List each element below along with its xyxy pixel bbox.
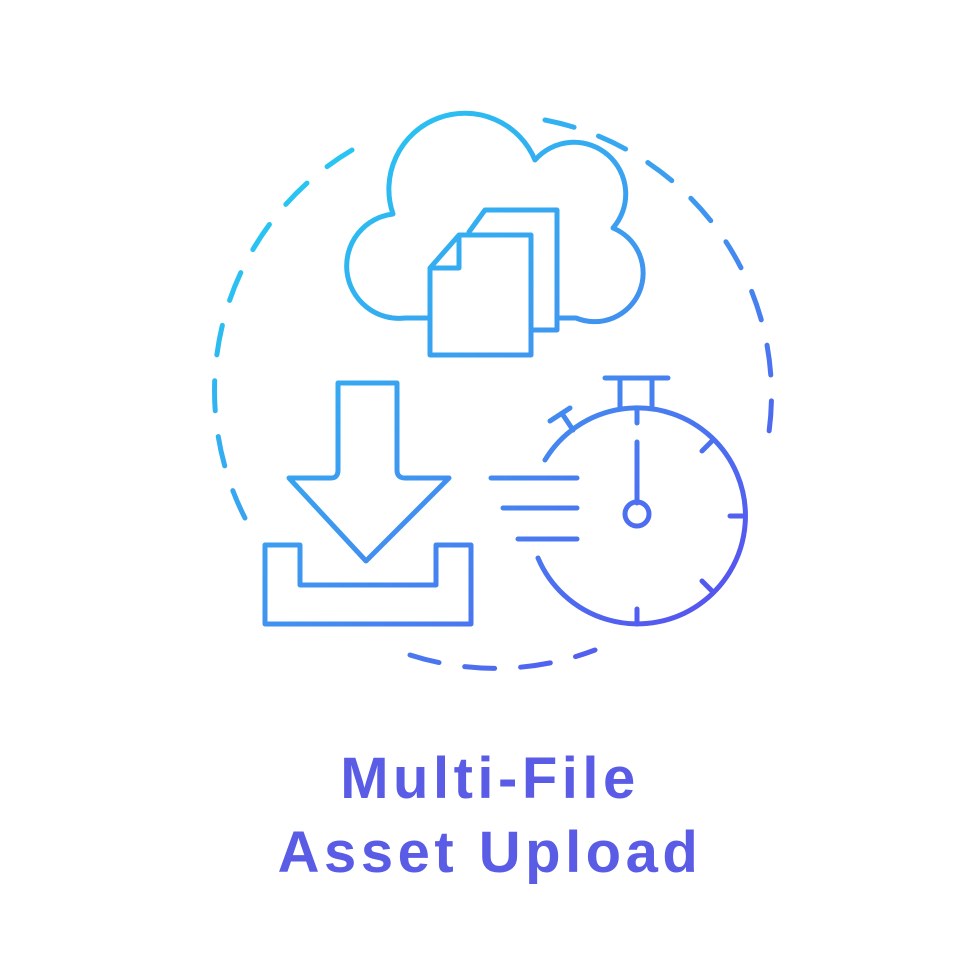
cloud with files <box>347 113 643 355</box>
download arrow and tray <box>265 383 471 624</box>
title line 2: Asset Upload <box>278 820 702 885</box>
speed lines <box>491 478 577 539</box>
stopwatch <box>538 378 745 624</box>
title line 1: Multi-File <box>340 746 640 811</box>
dashed ring <box>215 120 771 668</box>
